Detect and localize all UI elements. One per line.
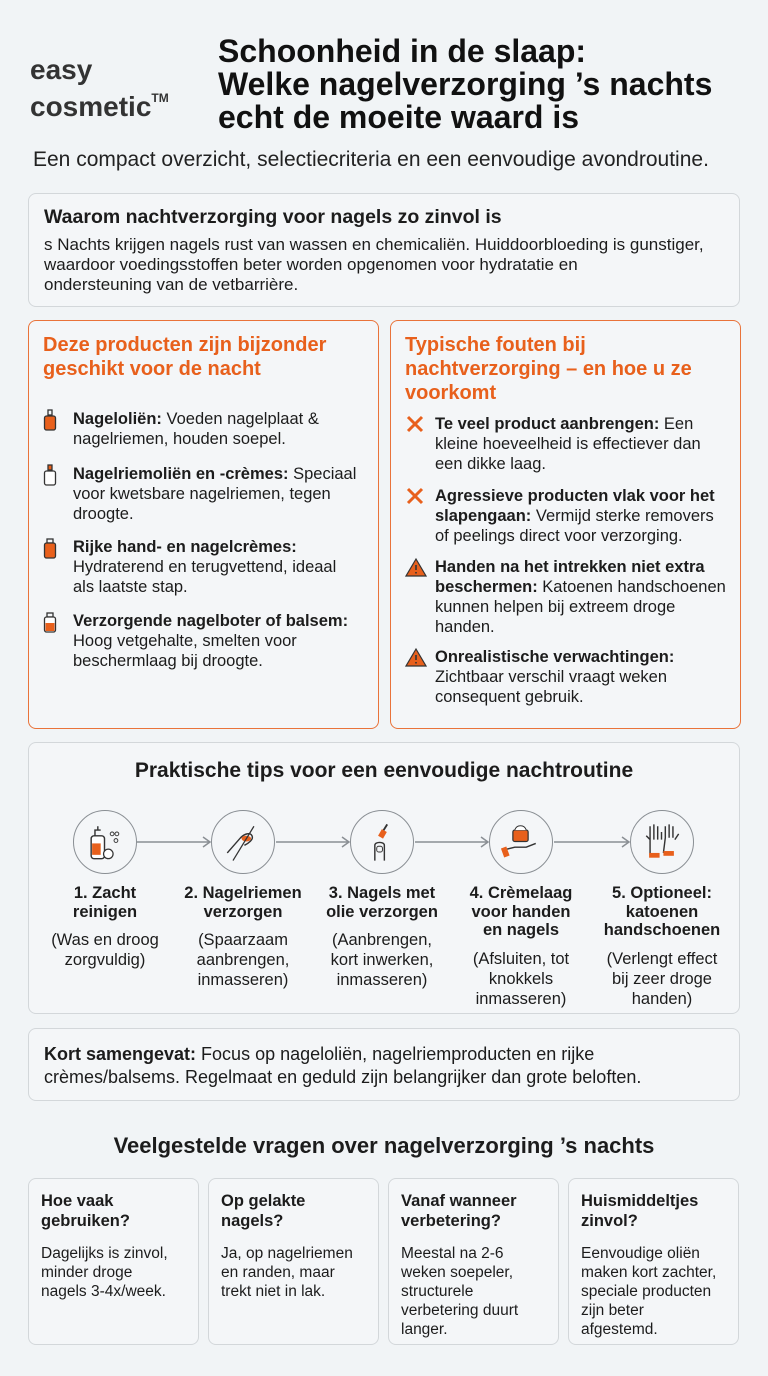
title: echt de moeite waard is <box>218 99 579 135</box>
FAQ card 1: nagels 3-4x/week. <box>41 1283 166 1300</box>
mistake 1: een dikke laag. <box>435 455 546 473</box>
item: rich creams <box>44 538 336 596</box>
FAQ card 4: maken kort zachter, <box>581 1264 716 1281</box>
body text <box>44 235 704 294</box>
FAQ card 1: minder droge <box>41 1264 132 1281</box>
heading: voorkomt <box>405 382 496 404</box>
mistake 2: Agressieve producten vlak voor het <box>435 487 715 505</box>
FAQ card 1: Dagelijks is zinvol, <box>41 1245 168 1262</box>
mistake 3: Handen na het intrekken niet extra <box>435 558 705 576</box>
FAQ card 2: trekt niet in lak. <box>221 1283 325 1300</box>
step 5 <box>604 884 720 1008</box>
step 1 <box>51 884 159 969</box>
mistake 1: kleine hoeveelheid is effectiever dan <box>435 435 701 453</box>
item: nail oils: Nageloliën: Voeden nagelplaat & <box>73 410 319 428</box>
step 4: voor handen <box>471 902 570 920</box>
item: nail oils: nagelriemen, houden soepel. <box>73 430 286 448</box>
step 3: olie verzorgen <box>326 902 438 920</box>
panel: suitable products <box>28 320 379 729</box>
FAQ card 4: zinvol? <box>581 1212 638 1230</box>
panel: why night care <box>28 193 740 307</box>
panel: typical mistakes <box>390 320 741 729</box>
mistake 3: kunnen helpen bij extreem droge <box>435 598 675 616</box>
icon: soap <box>73 810 137 874</box>
item: rich creams: Rijke hand- en nagelcrèmes: <box>73 538 297 556</box>
FAQ card 2: Op gelakte <box>221 1192 305 1210</box>
heading <box>405 334 692 404</box>
FAQ card 2 <box>208 1178 379 1345</box>
step 5: 5. Optioneel: <box>612 884 712 902</box>
mistake 1: Te veel product aanbrengen: Een <box>435 415 693 433</box>
FAQ card 4: afgestemd. <box>581 1321 658 1338</box>
title <box>218 33 712 135</box>
mistake 1 <box>407 415 701 473</box>
step 4 <box>470 884 572 1008</box>
body text: s Nachts krijgen nagels rust van wassen en chemicaliën. Huiddoorbloeding is gunstiger, <box>44 235 704 254</box>
step 4: knokkels <box>489 970 553 988</box>
mistake 3: handen. <box>435 618 495 636</box>
item: cuticle oils <box>44 464 356 523</box>
title: Welke nagelverzorging ’s nachts <box>218 66 712 102</box>
FAQ card 3: verbetering duurt <box>401 1302 518 1319</box>
heading: nachtverzorging – en hoe u ze <box>405 358 692 380</box>
FAQ card 3: structurele <box>401 1283 473 1300</box>
mistake 2: of peelings direct voor verzorging. <box>435 527 683 545</box>
step 2: aanbrengen, <box>197 951 289 969</box>
mistake 4: consequent gebruik. <box>435 688 584 706</box>
summary <box>28 1028 740 1101</box>
mistake 2 <box>407 487 715 545</box>
FAQ heading: Veelgestelde vragen over nagelverzorging ’s nachts <box>114 1133 654 1158</box>
item: nail oils <box>44 409 319 448</box>
icon: gloves <box>630 810 694 874</box>
mistake 2: slapengaan: Vermijd sterke removers <box>435 507 714 525</box>
item: rich creams: Hydraterend en terugvettend, ideaal <box>73 558 336 576</box>
logo: cosmeticTM <box>30 91 169 122</box>
FAQ card 4: Eenvoudige oliën <box>581 1245 700 1262</box>
step 4: (Afsluiten, tot <box>473 950 569 968</box>
FAQ card 2: Ja, op nagelriemen <box>221 1245 353 1262</box>
step 5: handschoenen <box>604 921 720 939</box>
step 5: katoenen <box>626 902 698 920</box>
heading <box>43 334 326 380</box>
logo <box>30 54 169 122</box>
step 5: bij zeer droge <box>612 970 712 988</box>
mistake 3: beschermen: Katoenen handschoenen <box>435 578 726 596</box>
step 1: reinigen <box>73 902 137 920</box>
summary: crèmes/balsems. Regelmaat en geduld zijn belangrijker dan grote beloften. <box>44 1067 641 1087</box>
step 2 <box>184 884 302 989</box>
item: butter balm: Verzorgende nagelboter of balsem: <box>73 612 348 630</box>
step 1: 1. Zacht <box>74 884 136 902</box>
arrows <box>137 836 630 848</box>
FAQ card 3: verbetering? <box>401 1212 501 1230</box>
item: cuticle oils: Nagelriemoliën en -crèmes: Speciaal <box>73 465 356 483</box>
step 2: inmasseren) <box>198 971 288 989</box>
step 2: (Spaarzaam <box>198 931 288 949</box>
FAQ card 3: Meestal na 2-6 <box>401 1245 504 1262</box>
step 5: (Verlengt effect <box>607 950 717 968</box>
panel: practical tips <box>28 742 740 1014</box>
step 2: 2. Nagelriemen <box>184 884 302 902</box>
body text: ondersteuning van de vetbarrière. <box>44 275 298 294</box>
FAQ card 1: Hoe vaak <box>41 1192 113 1210</box>
FAQ card 3: langer. <box>401 1321 448 1338</box>
heading: Typische fouten bij <box>405 334 586 356</box>
FAQ card 2: en randen, maar <box>221 1264 335 1281</box>
FAQ card 4: zijn beter <box>581 1302 644 1319</box>
item: cuticle oils: voor kwetsbare nagelriemen, tegen <box>73 485 331 503</box>
body text: waardoor voedingsstoffen beter worden opgenomen voor hydratatie en <box>44 255 578 274</box>
step 3: kort inwerken, <box>331 951 433 969</box>
heading: geschikt voor de nacht <box>43 358 261 380</box>
heading: tips: Praktische tips voor een eenvoudige nachtroutine <box>135 759 633 782</box>
step 3 <box>326 884 438 989</box>
step 1: zorgvuldig) <box>65 951 145 969</box>
FAQ card 4 <box>568 1178 739 1345</box>
step 4: 4. Crèmelaag <box>470 884 572 902</box>
FAQ card 3: Vanaf wanneer <box>401 1192 517 1210</box>
step 3: 3. Nagels met <box>329 884 435 902</box>
step 4: inmasseren) <box>476 990 566 1008</box>
FAQ card 4: speciale producten <box>581 1283 711 1300</box>
FAQ card 3 <box>388 1178 559 1345</box>
step 3: inmasseren) <box>337 971 427 989</box>
item: butter balm: beschermlaag bij droogte. <box>73 652 263 670</box>
item: rich creams: als laatste stap. <box>73 578 188 596</box>
FAQ card 4: Huismiddeltjes <box>581 1192 698 1210</box>
step 2: verzorgen <box>204 902 282 920</box>
mistake 4: Zichtbaar verschil vraagt weken <box>435 668 667 686</box>
mistake 4 <box>405 648 674 706</box>
title: Schoonheid in de slaap: <box>218 33 586 69</box>
FAQ card 1 <box>28 1178 199 1345</box>
icon: cream hand <box>489 810 553 874</box>
item: cuticle oils: droogte. <box>73 505 134 523</box>
icon: cuticle <box>211 810 275 874</box>
subtitle: Een compact overzicht, selectiecriteria en een eenvoudige avondroutine. <box>33 148 709 171</box>
item: butter balm: Hoog vetgehalte, smelten voor <box>73 632 297 650</box>
icon: oil dropper <box>350 810 414 874</box>
summary: Kort samengevat: Focus op nageloliën, nagelriemproducten en rijke <box>44 1044 594 1064</box>
step 5: handen) <box>632 990 692 1008</box>
heading: Deze producten zijn bijzonder <box>43 334 326 356</box>
item: butter balm <box>44 612 348 670</box>
step 4: en nagels <box>483 921 559 939</box>
mistake 3 <box>405 558 726 636</box>
FAQ card 3: weken soepeler, <box>401 1264 513 1281</box>
FAQ card 2: nagels? <box>221 1212 283 1230</box>
mistake 4: Onrealistische verwachtingen: <box>435 648 674 666</box>
FAQ card 1: gebruiken? <box>41 1212 130 1230</box>
heading: Waarom nachtverzorging voor nagels zo zinvol is <box>44 206 502 228</box>
logo: easy <box>30 54 92 85</box>
step 3: (Aanbrengen, <box>332 931 432 949</box>
step 1: (Was en droog <box>51 931 159 949</box>
